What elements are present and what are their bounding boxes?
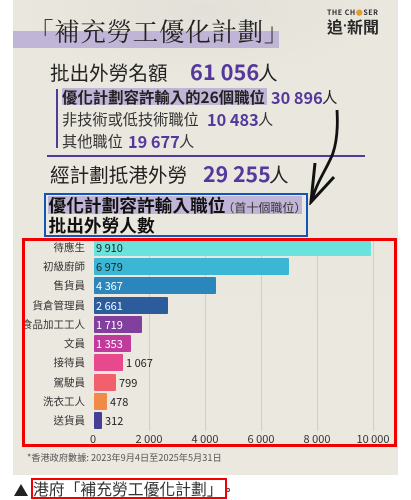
- breakdown row: non-skilled: 10 483: [207, 107, 259, 131]
- breakdown row: 26 jobs: 人: [322, 86, 337, 108]
- bar chart: 售貨員: [54, 278, 85, 293]
- breakdown row: others: 19 677: [128, 128, 180, 152]
- bar chart: 待應生: [54, 240, 85, 255]
- callout text line 2: 批出外勞人數: [48, 212, 155, 238]
- bar chart: 312: [105, 413, 123, 429]
- title: 「補充勞工優化計劃」: [28, 13, 290, 49]
- bar chart: 0: [90, 431, 96, 447]
- bar chart: 洗衣工人: [43, 394, 85, 409]
- bar chart: 2 000: [136, 431, 162, 447]
- bar chart: 初級廚師: [43, 259, 85, 274]
- arrived workers heading: 人: [269, 158, 289, 188]
- icon: curved arrow: [309, 110, 339, 205]
- arrived workers heading: [50, 158, 289, 188]
- breakdown row: 26 jobs: [62, 84, 337, 108]
- highlight: 26 jobs: [62, 88, 267, 105]
- logo: THE CH●SER: [327, 8, 378, 18]
- bar chart: 1 067: [126, 355, 153, 371]
- blue callout box: [44, 193, 308, 237]
- red box around caption: [31, 478, 227, 499]
- bar chart: 食品加工工人: [22, 317, 85, 332]
- caption: [14, 477, 230, 500]
- bar chart: 4 000: [192, 431, 218, 447]
- quota heading: 人: [258, 57, 278, 86]
- title highlight band: [13, 31, 279, 48]
- caption text: 港府「補充勞工優化計劃」: [33, 477, 223, 500]
- breakdown row: 26 jobs: 優化計劃容許輸入的26個職位: [62, 86, 265, 108]
- callout highlight: [48, 196, 302, 214]
- bar chart: 送貨員: [54, 413, 85, 428]
- quota heading: 61 056: [190, 56, 259, 87]
- bar chart: 8 000: [304, 431, 330, 447]
- breakdown row: non-skilled: 非技術或低技術職位: [62, 108, 199, 130]
- callout text line 1: 優化計劃容許輸入職位（首十個職位）: [48, 192, 306, 218]
- breakdown row: 26 jobs: 30 896: [271, 84, 323, 108]
- divider line: [47, 155, 365, 156]
- caption period: [226, 488, 230, 492]
- logo: [327, 8, 379, 38]
- bar chart: 6 000: [248, 431, 274, 447]
- red box around chart: [22, 238, 397, 447]
- bar chart: 文員: [64, 336, 85, 351]
- quota breakdown bracket: [56, 89, 58, 148]
- quota heading: 批出外勞名額: [50, 57, 168, 86]
- bar chart: 4 367: [96, 278, 123, 294]
- bar chart: 駕駛員: [54, 375, 85, 390]
- breakdown row: non-skilled: [62, 107, 273, 131]
- bar chart: 478: [110, 394, 128, 410]
- arrived workers heading: 經計劃抵港外勞: [50, 158, 187, 188]
- bar chart: 2 661: [96, 298, 123, 314]
- breakdown row: others: 其他職位: [62, 130, 123, 152]
- caption triangle: [14, 484, 28, 496]
- bar chart: 10 000: [356, 431, 390, 447]
- breakdown row: others: [62, 128, 194, 152]
- quota heading: [50, 56, 278, 87]
- bar chart: 貨倉管理員: [32, 298, 85, 313]
- breakdown row: others: 人: [179, 130, 194, 152]
- bar chart: 接待員: [54, 355, 85, 370]
- breakdown row: non-skilled: 人: [258, 108, 273, 130]
- logo: 新聞: [347, 14, 379, 38]
- source note: *香港政府數據: 2023年9月4日至2025年5月31日: [27, 450, 222, 464]
- logo: 追: [327, 14, 343, 38]
- bar chart: 6 979: [96, 259, 123, 275]
- bar chart: 1 719: [96, 317, 123, 333]
- logo: ·: [343, 16, 348, 32]
- bar chart: 799: [119, 375, 137, 391]
- bar chart: 9 910: [96, 240, 123, 256]
- arrived workers heading: 29 255: [203, 158, 271, 188]
- bar chart: 1 353: [96, 336, 123, 352]
- bar chart: [22, 240, 390, 447]
